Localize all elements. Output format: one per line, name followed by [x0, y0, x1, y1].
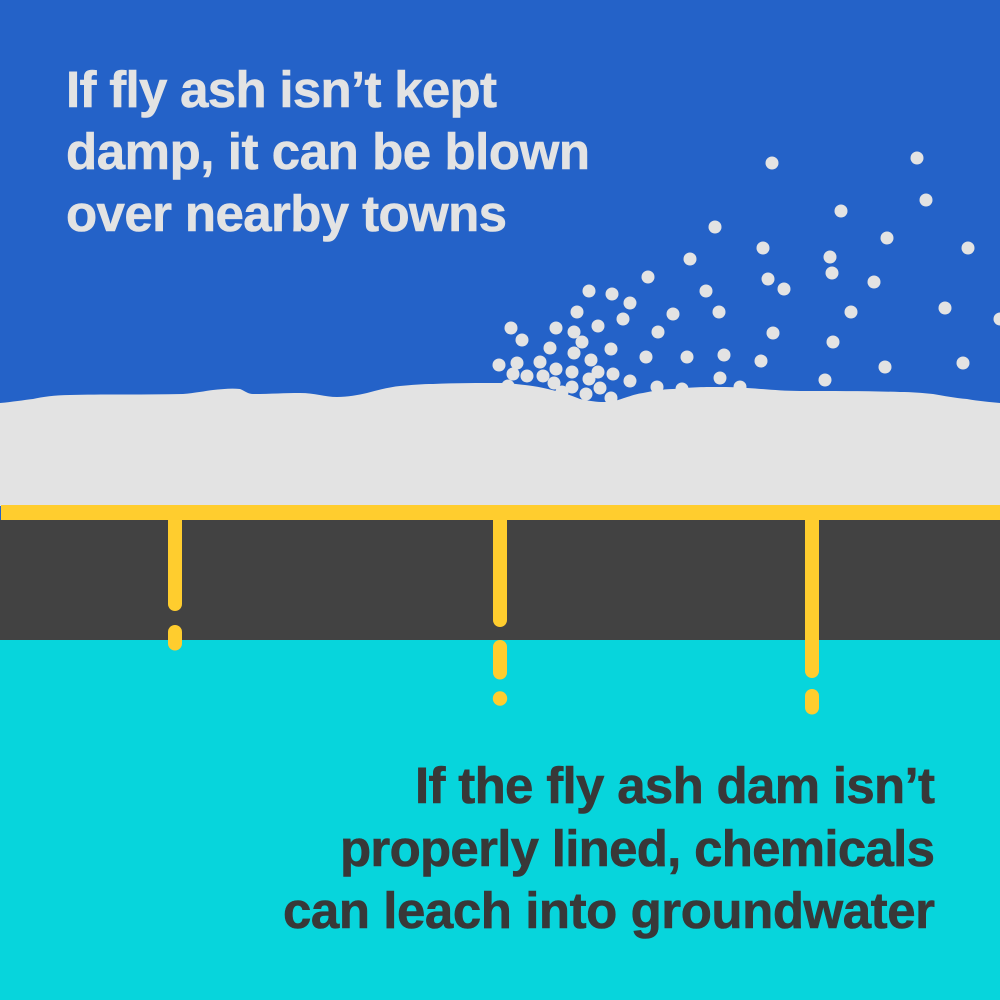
heading: fly ash blown: If fly ash isn’t kept: [66, 61, 497, 118]
heading: groundwater leaching: can leach into groundwater: [283, 882, 935, 939]
heading: fly ash blown: damp, it can be blown: [66, 123, 590, 180]
leak drips centre: [493, 519, 507, 706]
groundwater: [0, 640, 1000, 1000]
heading: fly ash blown: [66, 61, 590, 242]
yellow liner: [1, 505, 1000, 520]
heading: groundwater leaching: properly lined, chemicals: [340, 820, 935, 877]
leak drips left: [168, 519, 182, 650]
fly ash heap: [0, 383, 1000, 506]
heading: groundwater leaching: [283, 757, 935, 939]
heading: groundwater leaching: If the fly ash dam isn’t: [415, 757, 935, 814]
dark soil layer: [0, 520, 1000, 640]
fly ash dots: [492, 152, 1000, 404]
heading: fly ash blown: over nearby towns: [66, 185, 507, 242]
leak drips right: [805, 519, 819, 714]
